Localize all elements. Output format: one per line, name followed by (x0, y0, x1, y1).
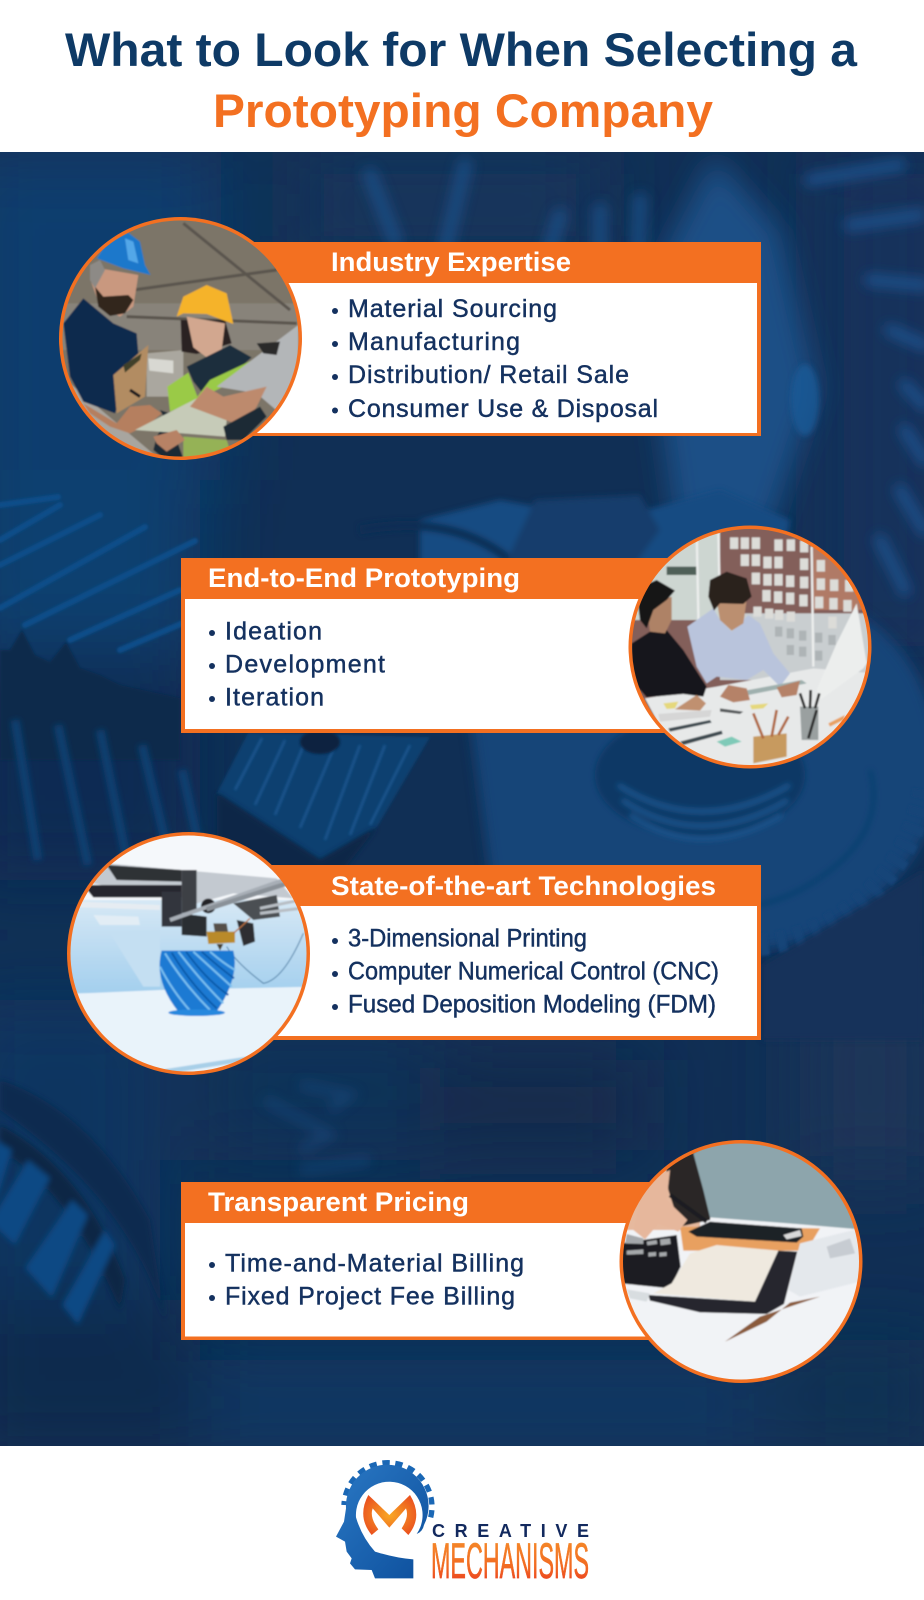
bearing bottom left (0, 1080, 165, 1325)
right man (687, 608, 790, 687)
paper details (663, 702, 768, 709)
splined cylinder (218, 733, 430, 865)
nozzle (213, 923, 228, 933)
dark gear teeth silhouette (0, 630, 180, 760)
photo: 3D printer with blue vase (67, 830, 313, 1077)
man shirt (63, 298, 138, 413)
left helical gear teeth (0, 497, 195, 650)
wood holder and pencils (753, 733, 787, 763)
text: MECHANISMS (431, 1533, 589, 1589)
list: Fused Deposition Modeling (FDM) (348, 990, 716, 1018)
faint teeth below third photo (266, 1082, 368, 1175)
list (209, 1250, 524, 1310)
table (78, 986, 302, 1072)
list: Material Sourcing (348, 295, 557, 323)
pen (670, 1195, 707, 1222)
card: State-of-the-art Technologies (250, 865, 761, 1040)
card: Transparent Pricing (181, 1182, 671, 1340)
woman (181, 320, 232, 354)
threaded shaft (594, 733, 874, 906)
calculator (620, 1235, 681, 1288)
list: Iteration (225, 684, 324, 712)
notebook (653, 1245, 778, 1302)
machine (93, 863, 293, 903)
vase (160, 951, 235, 1012)
gear teeth right (810, 165, 924, 590)
list: Consumer Use & Disposal (348, 395, 658, 423)
photo: two engineers in hard hats (57, 217, 303, 463)
list: Manufacturing (348, 328, 520, 356)
heading: Transparent Pricing (208, 1187, 469, 1217)
phone (688, 1222, 803, 1243)
list: Time-and-Material Billing (225, 1250, 524, 1278)
monitor (826, 603, 867, 672)
card: Industry Expertise (220, 242, 761, 436)
blurred teeth top (370, 165, 640, 255)
grey panel (217, 325, 298, 413)
icon: gear head with M (336, 1463, 432, 1578)
woman hands (190, 387, 267, 427)
hand (633, 1170, 687, 1239)
large spur gear (470, 580, 924, 1040)
list: Ideation (225, 618, 322, 646)
list (332, 295, 658, 423)
title (65, 23, 858, 137)
card: End-to-End Prototyping (181, 558, 681, 733)
list: Development (225, 650, 385, 678)
tablet and hands (740, 680, 807, 695)
title: What to Look for When Selecting a (65, 23, 858, 76)
list: 3-Dimensional Printing (348, 924, 587, 952)
clipboard (113, 345, 148, 413)
list (332, 924, 719, 1018)
photo: two colleagues at a desk (627, 523, 873, 770)
man arm and hand (83, 403, 162, 433)
right papers (788, 1227, 867, 1297)
logo: Creative Mechanisms (336, 1463, 589, 1589)
list (209, 618, 385, 712)
wordmark: CREATIVE: CREATIVE (432, 1521, 589, 1541)
cable (227, 933, 303, 983)
blue helmet (97, 233, 151, 275)
tablet (135, 398, 227, 437)
heading: End-to-End Prototyping (208, 563, 520, 593)
left man (632, 630, 707, 697)
bright wedge upper right (650, 156, 817, 560)
desk (680, 1227, 820, 1251)
heading: Industry Expertise (331, 247, 571, 277)
list: Computer Numerical Control (CNC) (348, 958, 719, 986)
heading: State-of-the-art Technologies (331, 871, 716, 901)
list: Distribution/ Retail Sale (348, 361, 629, 389)
list: Fixed Project Fee Billing (225, 1282, 515, 1310)
hub and dark ring under first card (416, 364, 821, 558)
title: Prototyping Company (213, 84, 713, 137)
photo: calculator and notebook on a desk (620, 1137, 867, 1383)
vertical gear teeth (15, 720, 200, 865)
man face and beard (90, 267, 138, 317)
